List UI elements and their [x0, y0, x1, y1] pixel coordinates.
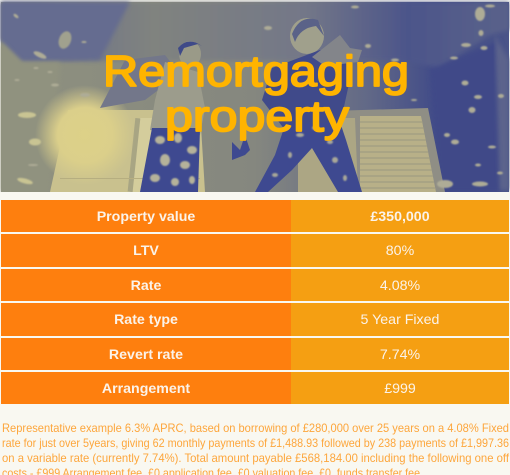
row: LTV value: 80% — [386, 242, 414, 258]
row: revert rate label — [1, 338, 291, 370]
row: LTV label — [1, 234, 291, 267]
row: arrangement label — [1, 372, 291, 404]
left window — [35, 85, 205, 192]
right window with blinds — [298, 108, 445, 192]
row: rate value — [291, 269, 509, 301]
row: arrangement value — [291, 372, 509, 404]
title: property — [165, 92, 349, 141]
title: Remortgaging — [103, 47, 409, 96]
falling feathers — [13, 4, 504, 188]
row: revert rate value — [291, 338, 509, 370]
row: LTV label: LTV — [133, 242, 159, 258]
photo background — [1, 2, 509, 192]
representative example note — [2, 421, 510, 475]
row: rate value: 4.08% — [380, 278, 420, 294]
row: property value: £350,000 — [370, 209, 430, 225]
row: property value label — [1, 200, 291, 232]
title — [103, 47, 409, 141]
row: revert rate value: 7.74% — [380, 347, 420, 363]
child on left — [100, 41, 250, 192]
row: rate label: Rate — [131, 278, 161, 294]
row: rate type value: 5 Year Fixed — [361, 312, 439, 328]
row: rate type value — [291, 303, 509, 336]
row: rate type label: Rate type — [114, 312, 178, 328]
row: arrangement label: Arrangement — [102, 381, 190, 397]
row: property value — [291, 200, 509, 232]
row: property value label: Property value — [97, 209, 195, 225]
row: LTV value — [291, 234, 509, 267]
row: revert rate label: Revert rate — [109, 347, 183, 363]
child on right — [255, 18, 362, 192]
table: property details — [1, 200, 509, 404]
row: arrangement value: £999 — [384, 381, 416, 397]
row: rate type label — [1, 303, 291, 336]
hero photo with title — [0, 0, 510, 192]
row: rate label — [1, 269, 291, 301]
